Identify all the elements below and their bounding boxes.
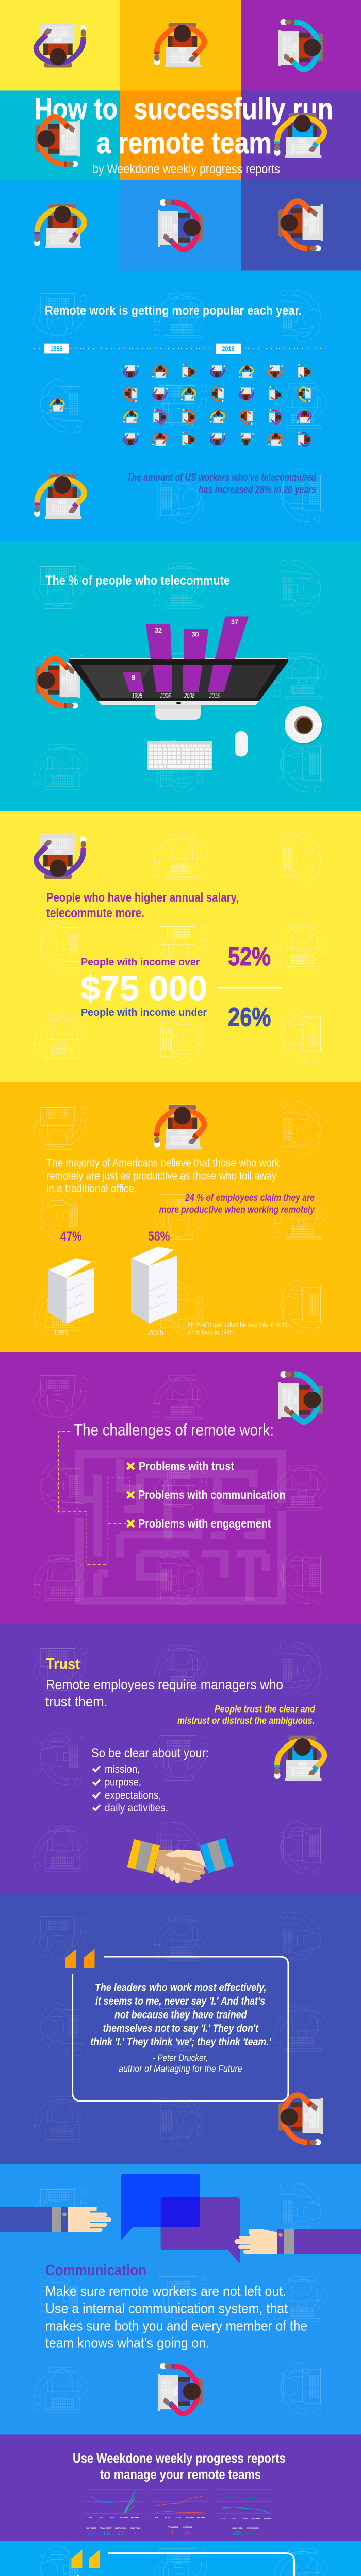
line chart: team metrics: 23-30 bbox=[110, 2517, 114, 2519]
panel: trust bbox=[0, 1623, 361, 1893]
line chart: team metrics: 4 bbox=[134, 2531, 137, 2536]
icon: mouse bbox=[235, 731, 248, 756]
icon: worker in pink on blue tile bbox=[158, 199, 203, 249]
panel: challenges of remote work bbox=[0, 1352, 361, 1623]
icon: worker in teal bbox=[278, 1371, 323, 1422]
heading: to manage your remote teams bbox=[100, 2467, 261, 2482]
callout: telecommuting increase: The amount of US workers who've telecommuted bbox=[127, 472, 317, 483]
icon: worker in purple on yellow tile bbox=[36, 23, 87, 68]
line chart: completion and weekscore: COMPLETI... bbox=[232, 2527, 243, 2529]
quote attribution bbox=[119, 2053, 242, 2074]
quote text: think 'I.' They think 'we'; they think 'team.' bbox=[90, 2036, 271, 2048]
quote text: it seems to me, never say 'I.' And that's bbox=[95, 1995, 265, 2007]
bar chart: telecommuting by year: 2008 bbox=[184, 692, 195, 700]
checklist: purpose, bbox=[105, 1776, 141, 1788]
line chart: team metrics: 9-16 bbox=[89, 2517, 92, 2519]
quote text bbox=[90, 1982, 271, 2048]
icon: worker in purple bbox=[36, 835, 87, 879]
line chart: problems and overdue: 1 bbox=[171, 2530, 174, 2535]
text block: Remote employees require managers who bbox=[46, 1676, 283, 1692]
panel: productivity belief bbox=[0, 1082, 361, 1352]
line chart: problems and overdue: PROBLEMS bbox=[168, 2526, 178, 2528]
big number: $75 000 bbox=[80, 969, 207, 1007]
quote attribution: author of Managing for the Future bbox=[119, 2064, 242, 2074]
text block: team knows what’s going on. bbox=[45, 2335, 209, 2351]
line chart: completion and weekscore: last week bbox=[252, 2518, 260, 2520]
panel: Peter Drucker quote bbox=[0, 1893, 361, 2164]
icon: speech bubbles bbox=[121, 2174, 240, 2263]
bar chart: telecommuting by year: 37 bbox=[231, 618, 238, 626]
line chart: team metrics: 16-23 bbox=[99, 2517, 103, 2519]
icon: worker in orange bbox=[278, 2095, 323, 2145]
line chart: problems and overdue: last week bbox=[186, 2517, 194, 2519]
line chart: team metrics: 2.5 bbox=[118, 2531, 124, 2536]
bar chart: telecommuting by year: 9 bbox=[131, 673, 136, 682]
bar chart: telecommuting by year: 32 bbox=[155, 626, 162, 634]
chart note bbox=[188, 1320, 288, 1336]
icon: worker in orange bbox=[35, 658, 80, 709]
icon: worker in orange on amber tile bbox=[154, 23, 204, 67]
icon: worker in pink bbox=[158, 2363, 203, 2413]
line chart: team metrics bbox=[84, 2489, 143, 2536]
icon: worker in orange on indigo tile bbox=[278, 201, 323, 251]
quote frame bbox=[78, 2553, 294, 2576]
line chart: problems and overdue: 16 bbox=[185, 2530, 190, 2535]
icon: coffee cup bbox=[285, 706, 323, 744]
chart note: 47 % back in 1995 bbox=[188, 1328, 233, 1336]
list item: engagement: Problems with engagement bbox=[138, 1517, 271, 1530]
panel: percent of people who telecommute bbox=[0, 541, 361, 811]
line chart: team metrics: ENERGY LE... bbox=[115, 2527, 127, 2529]
list item: trust: Problems with trust bbox=[139, 1460, 234, 1473]
stat: income under 75000: 26% bbox=[228, 1003, 271, 1032]
icon: worker in orange bbox=[154, 1105, 204, 1150]
heading bbox=[73, 2450, 286, 2482]
heading: People who have higher annual salary, bbox=[46, 891, 239, 905]
line chart: completion and weekscore: 25% bbox=[233, 2531, 242, 2536]
stat: income over 75000: 52% bbox=[228, 942, 271, 971]
timeline with years: 2016 bbox=[222, 344, 235, 352]
line chart: problems and overdue: 23-30 bbox=[176, 2517, 181, 2519]
list item: communication: Problems with communication bbox=[138, 1488, 286, 1501]
icon: worker in teal on purple tile bbox=[278, 19, 323, 69]
text block: makes sure both you and every member of the bbox=[45, 2318, 307, 2334]
icon: left hand bbox=[0, 2207, 111, 2232]
callout: 24 % of employees claim they are bbox=[185, 1193, 315, 1204]
stat: income over 75000 bbox=[81, 942, 271, 971]
text block: remotely are just as productive as those who toil away bbox=[46, 1169, 277, 1182]
line chart: completion and weekscore bbox=[216, 2489, 275, 2536]
icon: worker in amber on light blue tile bbox=[34, 204, 85, 248]
callout: telecommuting increase: has increased 28% in 20 years bbox=[199, 484, 316, 496]
chart: paper stack 2015 bbox=[131, 1229, 177, 1337]
heading: The % of people who telecommute bbox=[45, 573, 230, 588]
line chart: completion and weekscore: 23-30 bbox=[243, 2518, 248, 2520]
quote text: themselves not to say 'I.' They don't bbox=[103, 2023, 259, 2035]
text block: in a traditional office. bbox=[46, 1182, 137, 1195]
line chart: team metrics: this week bbox=[131, 2517, 139, 2519]
title bbox=[35, 92, 333, 160]
icon: desktop monitor bbox=[69, 659, 288, 720]
icon: worker in amber on deep purple tile bbox=[274, 113, 324, 158]
text block bbox=[46, 1156, 280, 1195]
quote text: The leaders who work most effectively, bbox=[95, 1982, 266, 1994]
stat: income under 75000: People with income under bbox=[81, 1007, 207, 1019]
callout bbox=[159, 1193, 315, 1215]
quote attribution: - Peter Drucker, bbox=[153, 2053, 208, 2063]
chart: paper stack 1995 bbox=[48, 1229, 94, 1337]
line chart: team metrics: 3.5 bbox=[88, 2531, 94, 2536]
line chart: team metrics: 4.5 bbox=[103, 2531, 109, 2536]
line chart: problems and overdue: 9-16 bbox=[155, 2517, 158, 2519]
dashed path through maze bbox=[58, 1432, 130, 1564]
checklist: expectations, bbox=[105, 1789, 161, 1801]
line chart: problems and overdue: OVERDUE bbox=[183, 2526, 192, 2528]
heading: The challenges of remote work: bbox=[74, 1421, 274, 1439]
maze illustration bbox=[79, 1454, 282, 1601]
line chart: completion and weekscore: 9-16 bbox=[221, 2518, 225, 2520]
pictogram grid: workers in 2016 bbox=[123, 364, 311, 446]
chart: paper stack 2015: 58% bbox=[148, 1229, 170, 1244]
heading: Remote work is getting more popular each year. bbox=[45, 303, 302, 318]
quote marks bbox=[71, 2550, 100, 2568]
bar chart: telecommuting by year: 2015 bbox=[209, 692, 220, 700]
icon: handshake bbox=[127, 1838, 234, 1883]
bar chart: telecommuting by year bbox=[123, 616, 249, 700]
title: a remote team bbox=[96, 126, 272, 160]
panel: Weekdone reports with charts bbox=[0, 2435, 361, 2541]
text block: Make sure remote workers are not left out. bbox=[45, 2283, 286, 2299]
heading: Communication bbox=[45, 2262, 146, 2279]
bar chart: telecommuting by year: 1995 bbox=[132, 692, 143, 700]
text block bbox=[45, 1676, 283, 1709]
line chart: team metrics: COMFY LE... bbox=[130, 2527, 141, 2529]
quote text: not because they have trained bbox=[114, 2009, 248, 2021]
panel: header with title over nine colored tiles bbox=[0, 0, 361, 271]
line chart: team metrics: TEAM SPIRIT bbox=[100, 2527, 112, 2529]
icon: right hand bbox=[234, 2229, 361, 2254]
panel: remote work popularity bbox=[0, 271, 361, 541]
icon: worker in amber bbox=[274, 1736, 324, 1781]
line chart: problems and overdue: this week bbox=[197, 2517, 205, 2519]
checklist bbox=[91, 1746, 209, 1814]
stat: income over 75000: People with income over bbox=[81, 957, 200, 968]
line chart: problems and overdue bbox=[150, 2489, 209, 2535]
text block: Use a internal communication system, that bbox=[45, 2301, 288, 2316]
heading bbox=[46, 891, 239, 920]
icon: keyboard bbox=[147, 741, 212, 770]
text block bbox=[45, 2283, 307, 2351]
pictogram: single worker in 1996 bbox=[50, 398, 64, 412]
timeline with years: 1996 bbox=[51, 344, 63, 352]
line chart: problems and overdue: 16-23 bbox=[165, 2517, 170, 2519]
chart: paper stack 2015: 2015 bbox=[147, 1329, 163, 1337]
line chart: completion and weekscore: WEEKSCORE bbox=[247, 2527, 259, 2529]
chart note: 58 % of those polled believe this in 2015 bbox=[188, 1320, 288, 1329]
callout: more productive when working remotely bbox=[159, 1205, 315, 1215]
line chart: completion and weekscore: 16-23 bbox=[232, 2518, 236, 2520]
heading: Use Weekdone weekly progress reports bbox=[73, 2450, 286, 2466]
bar chart: telecommuting by year: 2006 bbox=[160, 692, 171, 700]
text block: The majority of Americans believe that those who work bbox=[46, 1156, 280, 1170]
callout: People trust the clear and bbox=[215, 1704, 315, 1715]
callout: mistrust or distrust the ambiguous. bbox=[177, 1716, 315, 1726]
heading: Trust bbox=[46, 1656, 80, 1673]
line chart: team metrics: HAPPINESS bbox=[86, 2527, 96, 2529]
checklist: mission, bbox=[105, 1764, 140, 1775]
chart: paper stack 1995: 47% bbox=[60, 1229, 81, 1244]
line chart: team metrics: last week bbox=[120, 2517, 128, 2519]
text block: trust them. bbox=[45, 1693, 107, 1709]
title: How to bbox=[35, 92, 118, 126]
subtitle: by Weekdone weekly progress reports bbox=[92, 162, 280, 176]
panel: salary and telecommuting bbox=[0, 811, 361, 1082]
line chart: completion and weekscore: this week bbox=[264, 2518, 271, 2520]
panel: communication bbox=[0, 2164, 361, 2435]
stat: income under 75000 bbox=[81, 1003, 271, 1032]
bar chart: telecommuting by year: 30 bbox=[192, 630, 199, 638]
quote marks bbox=[65, 1948, 95, 1968]
heading: telecommute more. bbox=[46, 906, 144, 920]
icon: worker in amber bbox=[34, 474, 85, 519]
line chart: completion and weekscore: 63 bbox=[250, 2531, 255, 2536]
callout: telecommuting increase bbox=[127, 472, 317, 496]
checklist: So be clear about your: bbox=[91, 1746, 209, 1760]
checklist: daily activities. bbox=[105, 1802, 168, 1814]
callout bbox=[177, 1704, 315, 1726]
panel: Richard Beeson quote bbox=[0, 2541, 361, 2576]
chart: paper stack 1995: 1995 bbox=[54, 1329, 69, 1337]
quote frame bbox=[73, 1957, 288, 2101]
timeline with years bbox=[34, 344, 324, 354]
icon: worker in orange on teal tile bbox=[35, 117, 80, 167]
